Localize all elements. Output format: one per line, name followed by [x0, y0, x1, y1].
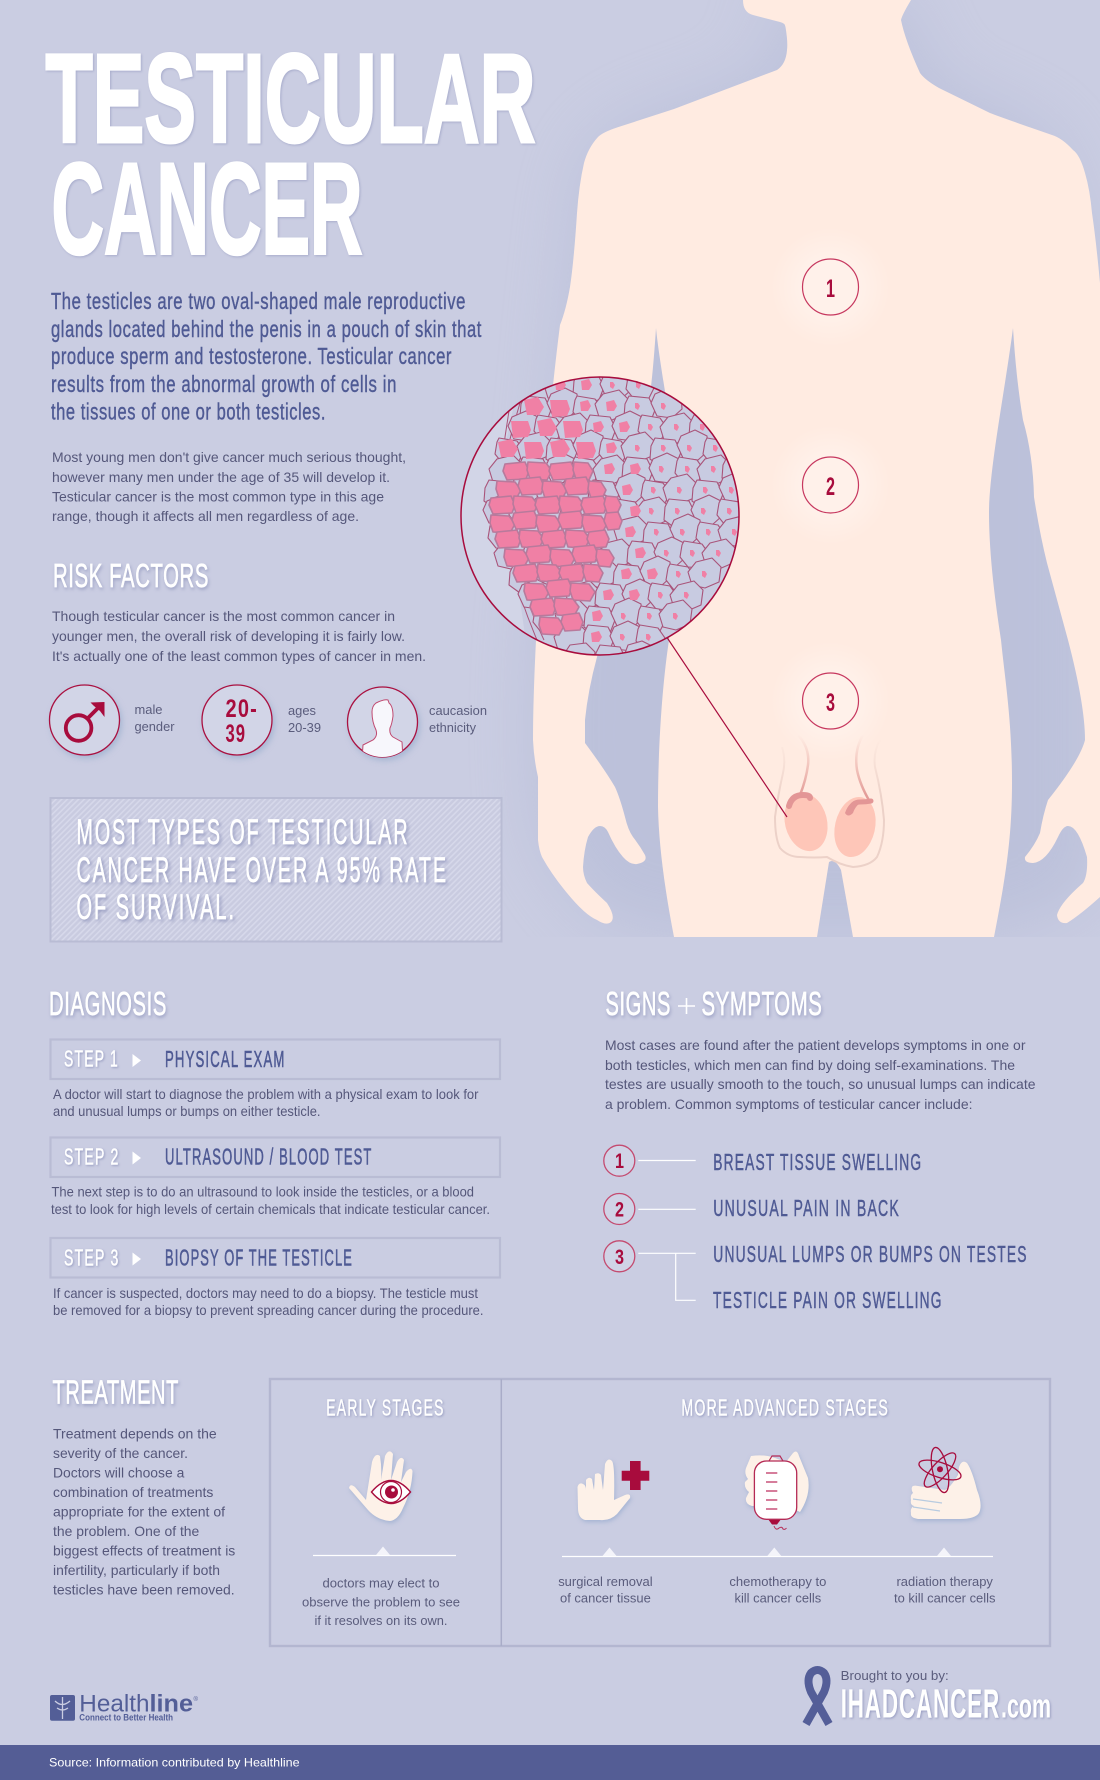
signs and symptoms text: Most cases are found after the patient develops symptoms in one or	[605, 1037, 1026, 1053]
diagnosis heading: DIAGNOSIS	[49, 985, 167, 1022]
callout: survival rate: MOST TYPES OF TESTICULAR	[76, 813, 409, 852]
body paragraph: range, though it affects all men regardless of age.	[52, 508, 359, 524]
treatment text: combination of treatments	[53, 1484, 213, 1500]
step 3	[50, 1238, 500, 1278]
intro text: the tissues of one or both testicles.	[51, 398, 326, 424]
icon: hand with chemotherapy bag	[745, 1452, 809, 1529]
step 1: STEP 1	[64, 1046, 119, 1072]
label: male gender: gender	[134, 719, 175, 734]
source footer bar	[0, 1745, 1100, 1780]
label: caucasian ethnicity: ethnicity	[429, 720, 476, 735]
marker 3	[770, 641, 890, 761]
healthline logo: ®	[194, 1696, 198, 1703]
body illustration	[533, 0, 1100, 937]
signs and symptoms text: both testicles, which men can find by doing self-examinations. The	[605, 1057, 1015, 1073]
symptom 1	[604, 1145, 922, 1176]
risk factors text	[52, 608, 426, 664]
signs and symptoms heading: SYMPTOMS	[702, 985, 822, 1022]
symptom 2: UNUSUAL PAIN IN BACK	[713, 1195, 900, 1221]
step 2 text: The next step is to do an ultrasound to look inside the testicles, or a blood	[52, 1184, 474, 1200]
early stages caption: doctors may elect to	[322, 1576, 440, 1590]
callout: survival rate: OF SURVIVAL.	[76, 888, 236, 927]
icon: ages 20-39: 39	[226, 720, 246, 748]
title: TESTICULAR	[46, 28, 536, 169]
icon: hand with atom	[911, 1446, 981, 1519]
label: caucasian ethnicity: caucasion	[429, 703, 487, 718]
ihadcancer logo: .com	[1001, 1687, 1051, 1725]
treatment heading: TREATMENT	[52, 1374, 179, 1410]
step 1	[50, 1040, 500, 1079]
risk factors heading: RISK FACTORS	[53, 557, 209, 594]
dense pink cell cluster	[489, 462, 622, 635]
step 3: STEP 3	[64, 1244, 120, 1270]
body paragraph: however many men under the age of 35 will develop it.	[52, 469, 390, 485]
radiation therapy caption: to kill cancer cells	[894, 1591, 996, 1606]
label: ages	[288, 703, 321, 735]
symptom 1: BREAST TISSUE SWELLING	[713, 1149, 922, 1175]
step 1 text	[53, 1086, 479, 1119]
marker 2: 2	[826, 473, 835, 501]
treatment text: testicles have been removed.	[53, 1582, 235, 1598]
chemotherapy caption	[729, 1574, 826, 1606]
body paragraph: Most young men don't give cancer much serious thought,	[52, 449, 406, 465]
label: ages: 20-39	[288, 720, 321, 735]
marker 1	[770, 227, 890, 347]
symptom 1: 1	[615, 1150, 624, 1173]
intro text: results from the abnormal growth of cells in	[51, 371, 397, 397]
magnified tissue cells	[460, 376, 740, 656]
label: caucasian ethnicity	[429, 703, 487, 735]
treatment text: Treatment depends on the	[53, 1426, 217, 1442]
risk factors text: Though testicular cancer is the most common cancer in	[52, 608, 395, 624]
body paragraph	[52, 449, 406, 524]
source footer bar: Source: Information contributed by Healthline	[49, 1756, 300, 1770]
early stages heading: EARLY STAGES	[326, 1395, 445, 1421]
signs and symptoms heading: SIGNS	[606, 985, 671, 1022]
healthline logo: Connect to Better Health	[79, 1712, 173, 1722]
surgical removal caption	[558, 1574, 653, 1606]
early stages caption: observe the problem to see	[302, 1594, 460, 1610]
radiation therapy caption	[894, 1574, 996, 1606]
step 3 text	[53, 1285, 484, 1318]
treatment text: biggest effects of treatment is	[53, 1542, 235, 1558]
step 1: PHYSICAL EXAM	[165, 1046, 286, 1072]
healthline logo: line	[150, 1691, 193, 1718]
title: CANCER	[52, 136, 362, 282]
step 1 text: A doctor will start to diagnose the problem with a physical exam to look for	[53, 1086, 479, 1102]
body paragraph: Testicular cancer is the most common type in this age	[52, 488, 384, 504]
callout: survival rate	[50, 798, 502, 942]
step 2: ULTRASOUND / BLOOD TEST	[165, 1144, 372, 1170]
signs and symptoms heading	[606, 985, 822, 1022]
icon: ages 20-39	[202, 685, 272, 755]
chemotherapy caption: chemotherapy to	[729, 1574, 826, 1589]
testicles diagram	[775, 735, 884, 867]
label: ages: ages	[288, 703, 316, 718]
step 2 text	[51, 1184, 490, 1217]
icon: hand with medical cross	[578, 1460, 649, 1520]
treatment text: severity of the cancer.	[53, 1445, 188, 1461]
icon: ribbon	[806, 1670, 829, 1724]
signs and symptoms text: testes are usually smooth to the touch, so unusual lumps can indicate	[605, 1076, 1036, 1092]
surgical removal caption: surgical removal	[558, 1574, 653, 1589]
icon: caucasian person	[348, 687, 418, 760]
treatment text	[53, 1426, 235, 1598]
icon: hand with eye	[349, 1451, 412, 1521]
surgical removal caption: of cancer tissue	[560, 1591, 651, 1606]
signs and symptoms text: a problem. Common symptoms of testicular cancer include:	[605, 1096, 972, 1112]
early stages caption	[302, 1576, 460, 1628]
intro text: produce sperm and testosterone. Testicular cancer	[51, 343, 452, 369]
step 3 text: If cancer is suspected, doctors may need to do a biopsy. The testicle must	[53, 1285, 478, 1301]
label: male gender	[134, 702, 175, 734]
step 1 text: and unusual lumps or bumps on either testicle.	[53, 1103, 320, 1119]
marker 1: 1	[826, 275, 835, 303]
callout: survival rate: CANCER HAVE OVER A 95% RATE	[76, 851, 448, 890]
ihadcancer logo	[806, 1668, 1051, 1726]
treatment text: appropriate for the extent of	[53, 1504, 225, 1520]
treatment text: infertility, particularly if both	[53, 1562, 220, 1578]
ihadcancer logo: Brought to you by:	[841, 1668, 949, 1683]
timeline: advanced stages	[562, 1548, 993, 1556]
treatment text: the problem. One of the	[53, 1523, 200, 1539]
more advanced stages heading: MORE ADVANCED STAGES	[681, 1395, 889, 1421]
icon: male gender	[50, 685, 120, 755]
symptom 2	[604, 1194, 900, 1224]
marker 3: 3	[826, 689, 835, 717]
title	[46, 28, 536, 282]
risk factors text: It's actually one of the least common types of cancer in men.	[52, 648, 426, 664]
intro text	[51, 288, 482, 424]
step 3 text: be removed for a biopsy to prevent spreading cancer during the procedure.	[53, 1302, 484, 1318]
step 2	[50, 1138, 500, 1177]
logo mark	[50, 1695, 75, 1721]
icon: ages 20-39: 20-	[226, 695, 258, 723]
chemotherapy caption: kill cancer cells	[734, 1591, 822, 1606]
healthline logo	[50, 1691, 198, 1722]
symptom 3: TESTICLE PAIN OR SWELLING	[713, 1287, 943, 1313]
intro text: The testicles are two oval-shaped male reproductive	[51, 288, 466, 314]
step 3: BIOPSY OF THE TESTICLE	[165, 1244, 353, 1270]
signs and symptoms text	[605, 1037, 1036, 1112]
intro text: glands located behind the penis in a pouch of skin that	[51, 316, 482, 342]
connector line from cell magnifier to testicle	[660, 627, 787, 817]
symptom 3	[604, 1241, 1028, 1313]
treatment panel	[270, 1379, 1050, 1646]
step 2: STEP 2	[64, 1144, 120, 1170]
symptom 3: 3	[615, 1246, 624, 1269]
early stages caption: if it resolves on its own.	[314, 1613, 448, 1628]
treatment text: Doctors will choose a	[53, 1464, 185, 1480]
step 2 text: test to look for high levels of certain chemicals that indicate testicular cancer.	[51, 1201, 490, 1217]
label: male gender: male	[134, 702, 162, 717]
radiation therapy caption: radiation therapy	[896, 1574, 993, 1589]
timeline: early stages	[313, 1546, 456, 1556]
healthline logo: Health	[79, 1691, 150, 1718]
marker 2	[770, 425, 890, 545]
body silhouette	[533, 0, 1100, 937]
symptom 2: 2	[615, 1198, 624, 1222]
risk factors text: younger men, the overall risk of developing it is fairly low.	[52, 628, 405, 644]
